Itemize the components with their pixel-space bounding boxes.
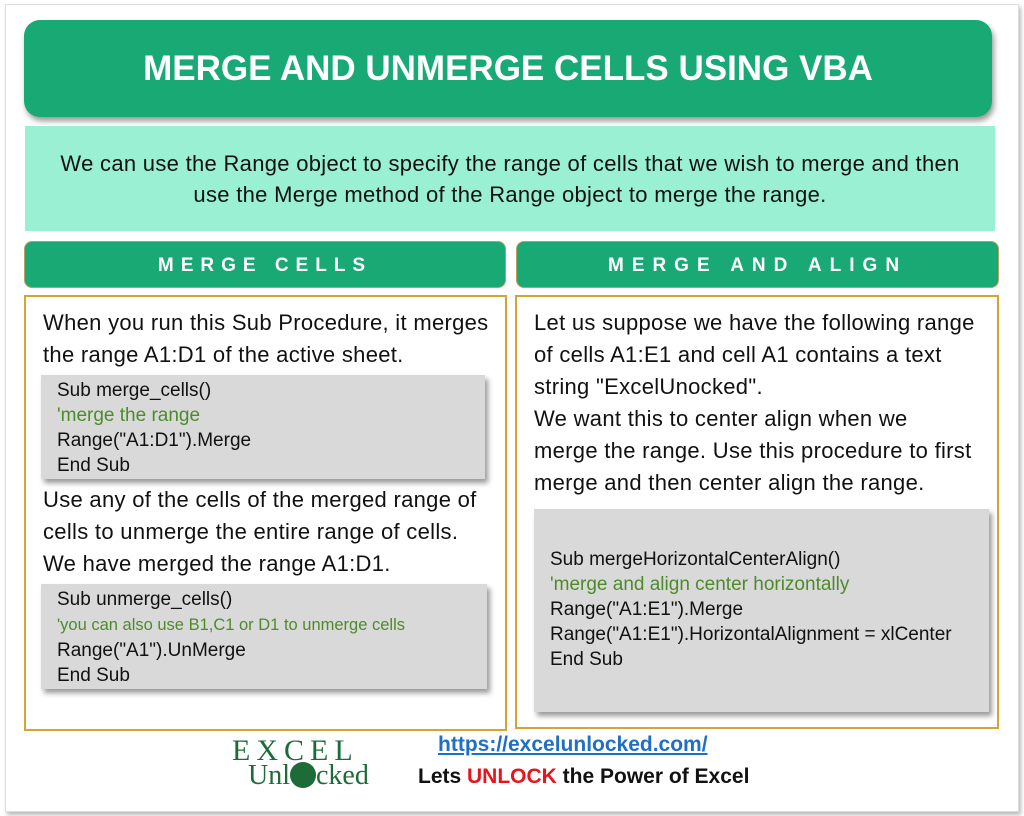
code: unmerge: Sub unmerge_cells() bbox=[57, 589, 232, 610]
heading: merge cells bbox=[24, 241, 506, 288]
intro text: We can use the Range object to specify the range of cells that we wish to merge and then bbox=[60, 151, 960, 176]
panel: merge and align bbox=[515, 295, 999, 729]
text: intro bbox=[43, 310, 488, 367]
code: merge: Sub merge_cells() bbox=[57, 380, 211, 401]
logo: Unl cked bbox=[248, 760, 369, 791]
code: merge: End Sub bbox=[57, 455, 130, 476]
text: unmerge: Use any of the cells of the merged range of bbox=[43, 487, 477, 512]
link: https://excelunlocked.com/ bbox=[438, 733, 708, 756]
text: unmerge: We have merged the range A1:D1. bbox=[43, 551, 391, 576]
logo bbox=[232, 734, 369, 791]
heading: merge cells: MERGE CELLS bbox=[158, 255, 372, 276]
code: merge: 'merge the range bbox=[57, 405, 200, 426]
code: merge and align: 'merge and align center horizontally bbox=[550, 574, 849, 595]
heading: merge and align: MERGE AND ALIGN bbox=[608, 255, 907, 276]
code: unmerge: 'you can also use B1,C1 or D1 to unmerge cells bbox=[57, 616, 405, 634]
text: intro: the range A1:D1 of the active sheet. bbox=[43, 342, 404, 367]
code: merge and align bbox=[534, 509, 989, 712]
code: merge bbox=[41, 375, 485, 479]
text: description: of cells A1:E1 and cell A1 contains a text bbox=[534, 342, 942, 367]
title: MERGE AND UNMERGE CELLS USING VBA bbox=[143, 49, 873, 88]
code: merge and align: Range("A1:E1").Merge bbox=[550, 599, 743, 620]
code: merge and align: Sub mergeHorizontalCenterAlign() bbox=[550, 549, 840, 570]
text: description: merge and then center align the range. bbox=[534, 470, 925, 495]
code: unmerge bbox=[41, 584, 487, 689]
text: description: Let us suppose we have the following range bbox=[534, 310, 975, 335]
text: unmerge: cells to unmerge the entire range of cells. bbox=[43, 519, 458, 544]
code: unmerge: End Sub bbox=[57, 665, 130, 686]
text: unmerge bbox=[43, 487, 477, 576]
heading: merge and align bbox=[516, 241, 999, 288]
code: merge: Range("A1:D1").Merge bbox=[57, 430, 251, 451]
code: merge and align: Range("A1:E1").HorizontalAlignment = xlCenter bbox=[550, 624, 952, 645]
title bbox=[24, 20, 992, 117]
text: description: string "ExcelUnocked". bbox=[534, 374, 763, 399]
logo: EXCEL bbox=[232, 734, 359, 767]
intro text: use the Merge method of the Range object to merge the range. bbox=[193, 182, 827, 207]
text: intro: When you run this Sub Procedure, it merges bbox=[43, 310, 488, 335]
panel: merge cells bbox=[24, 295, 507, 731]
code: unmerge: Range("A1").UnMerge bbox=[57, 640, 246, 661]
text: description bbox=[534, 310, 975, 495]
text: description: merge the range. Use this procedure to first bbox=[534, 438, 972, 463]
intro text bbox=[25, 126, 995, 231]
text: description: We want this to center align when we bbox=[534, 406, 908, 431]
tagline: Lets UNLOCK the Power of Excel bbox=[418, 765, 749, 788]
code: merge and align: End Sub bbox=[550, 649, 623, 670]
